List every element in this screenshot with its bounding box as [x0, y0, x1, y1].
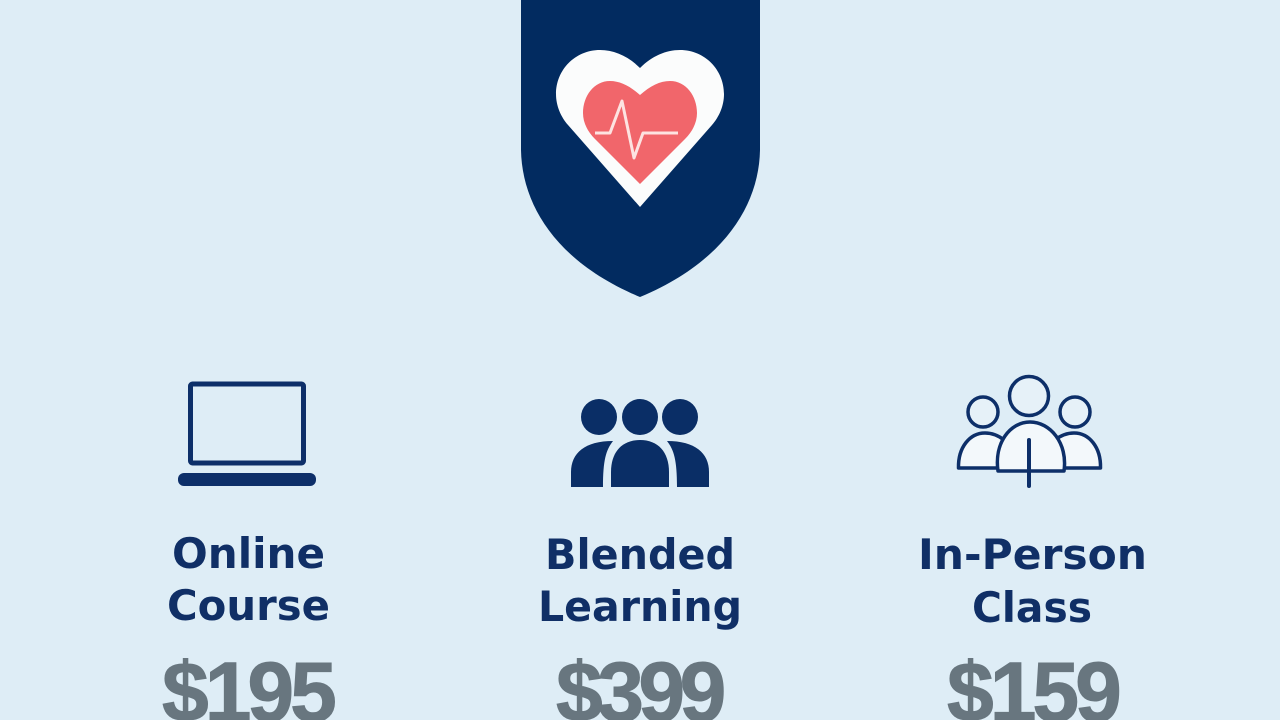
icon: red heart: [583, 81, 697, 184]
label: blended learning: Blended: [545, 530, 735, 579]
icon: outlined group of three people: [958, 376, 1101, 486]
column: online course: [162, 384, 335, 720]
column: blended learning: [538, 399, 742, 720]
label: online course: Course: [167, 581, 330, 630]
icon: laptop: [178, 384, 316, 486]
icon: shield with heart: [521, 0, 760, 297]
label: online course: Online: [172, 529, 325, 578]
icon: filled group of three people: [571, 399, 709, 487]
icon: heartbeat line: [595, 101, 678, 158]
column: in-person class: [918, 376, 1147, 720]
icon: white heart: [556, 50, 724, 207]
label: blended learning: Learning: [538, 582, 742, 631]
label: in-person class: In-Person: [918, 530, 1147, 579]
label: in-person class: [918, 530, 1147, 632]
label: blended learning: [538, 530, 742, 631]
label: online course: [167, 529, 330, 630]
label: in-person class: Class: [972, 583, 1092, 632]
